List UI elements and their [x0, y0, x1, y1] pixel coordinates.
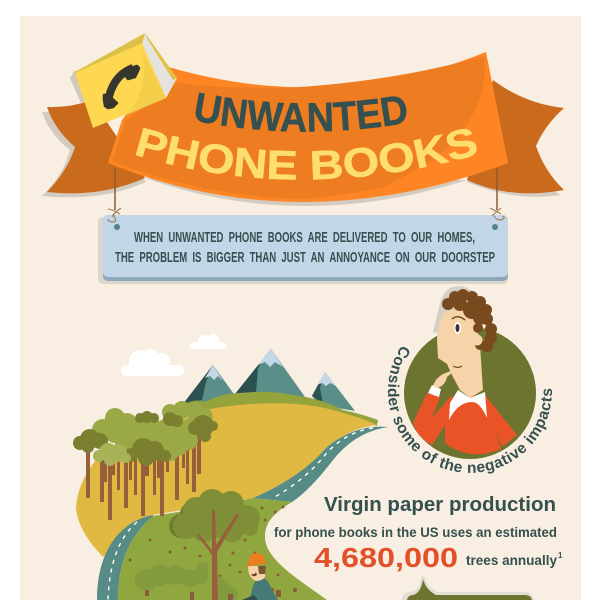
neck and face: [437, 308, 483, 398]
heading: Virgin paper production: [324, 493, 556, 516]
yellow hill: [76, 403, 377, 557]
foreground tree: [169, 489, 260, 600]
green field: [118, 498, 327, 600]
stumps: [145, 590, 281, 600]
speech bubble: [402, 575, 534, 600]
upper road: [253, 427, 388, 502]
title line 2: PHONE BOOKS: [136, 128, 477, 180]
green ridge: [183, 392, 378, 426]
icon: phone book: [70, 33, 177, 128]
worker: [242, 553, 278, 600]
illustration: thinking man: [388, 286, 552, 474]
low shrub: [135, 562, 238, 600]
forest trunks: [86, 435, 201, 520]
snow caps: [205, 365, 223, 381]
number unit: trees annually: [466, 552, 557, 568]
hair: [442, 289, 497, 352]
phone handset: [104, 66, 139, 108]
title ribbon: [42, 52, 564, 206]
field dots: [128, 506, 297, 592]
stat text block: [274, 493, 563, 573]
lower road: [97, 515, 153, 600]
mouth: [453, 366, 462, 368]
clouds: [121, 334, 226, 376]
footnote mark: 1: [558, 551, 563, 560]
ribbon left tail: [42, 100, 146, 197]
mountains: [183, 349, 355, 411]
forest canopy: [73, 401, 218, 466]
collar: [449, 390, 487, 420]
ribbon darker fold: [112, 56, 485, 199]
sweater: [413, 393, 517, 454]
illustration: landscape: [73, 334, 388, 600]
eye: [454, 322, 461, 334]
curved caption: Consider some of the negative impacts: [388, 347, 552, 474]
title line 1: UNWANTED: [196, 92, 406, 132]
info sign: [98, 215, 508, 284]
ribbon body: [108, 52, 508, 202]
sign holes: [114, 224, 120, 230]
medallion: [404, 327, 536, 459]
sign text: [115, 229, 495, 266]
big number: 4,680,000: [314, 542, 458, 573]
description: for phone books in the US uses an estimated: [274, 524, 557, 540]
cuff and hand: [428, 385, 441, 397]
ribbon right tail: [467, 80, 564, 197]
hair shadow: [433, 286, 476, 335]
strings and knots: [108, 168, 504, 222]
ear: [472, 334, 482, 346]
ribbon shadow: [145, 178, 467, 206]
